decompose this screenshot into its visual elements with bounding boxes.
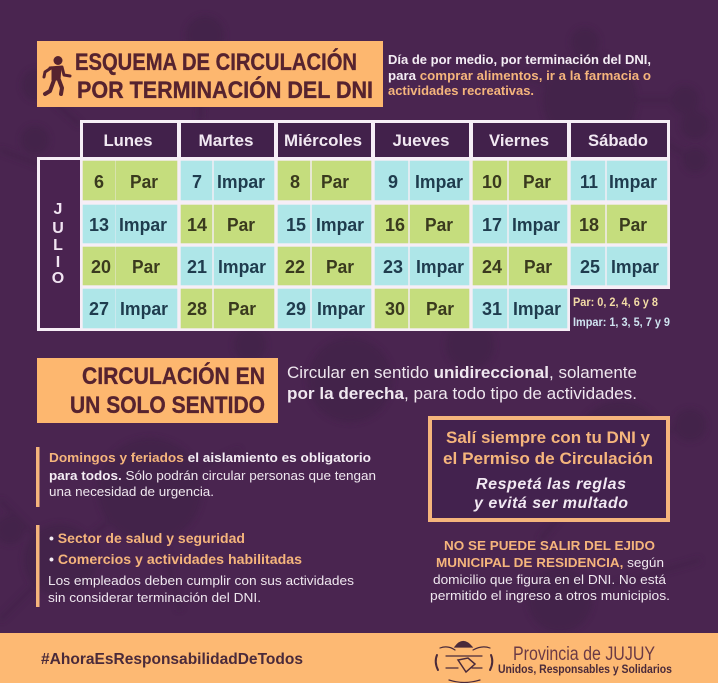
municipal restriction note: NO SE PUEDE SALIR DEL EJIDO [444, 538, 655, 553]
callout: carry DNI and permit: el Permiso de Circulación [443, 449, 653, 468]
week row: 27 to 31: Impar [120, 299, 168, 319]
week row: 27 to 31 [83, 289, 567, 328]
week row: 6 to 11 [83, 161, 667, 200]
one-way description [287, 363, 637, 403]
week row: 6 to 11: Par [130, 172, 158, 192]
title banner [37, 41, 383, 107]
weekday headers: Miércoles [284, 131, 362, 150]
callout: carry DNI and permit [430, 418, 668, 520]
week row: 6 to 11: Par [523, 172, 551, 192]
week row: 13 to 18: 14 [187, 215, 207, 235]
municipal restriction note: MUNICIPAL DE RESIDENCIA, según [436, 555, 664, 570]
sundays and holidays note: para todos. Sólo podrán circular personas que tengan [49, 468, 376, 483]
callout: carry DNI and permit: y evitá ser multado [473, 495, 628, 512]
week row: 27 to 31: 31 [482, 299, 502, 319]
weekday headers: Martes [198, 131, 254, 150]
month label: Julio [40, 160, 80, 328]
title text: ESQUEMA DE CIRCULACIÓN [75, 48, 357, 76]
calendar table [37, 120, 670, 331]
week row: 6 to 11: Par [321, 172, 349, 192]
intro text: actividades recreativas. [388, 83, 534, 98]
week row: 20 to 25: Par [524, 257, 552, 277]
week row: 27 to 31: 29 [286, 299, 306, 319]
week row: 13 to 18: 17 [482, 215, 502, 235]
exempt sectors note: Los empleados deben cumplir con sus actividades [48, 573, 355, 588]
exempt sectors note [36, 525, 355, 607]
title banner: POR TERMINACIÓN DEL DNI [77, 76, 373, 104]
week row: 13 to 18: Impar [119, 215, 167, 235]
province name and motto [498, 644, 672, 676]
week row: 13 to 18: 16 [385, 215, 405, 235]
week row: 20 to 25: Par [132, 257, 160, 277]
week row: 6 to 11: 10 [482, 172, 502, 192]
province name and motto: Unidos, Responsables y Solidarios [498, 662, 672, 676]
logo: Jujuy emblem [436, 642, 492, 682]
week row: 27 to 31: Impar [317, 299, 365, 319]
month label: Julio: L [53, 237, 63, 254]
exempt sectors note: • Comercios y actividades habilitadas [49, 552, 302, 567]
week row: 20 to 25: Impar [416, 257, 464, 277]
week row: 13 to 18: 13 [89, 215, 109, 235]
week row: 27 to 31: Par [426, 299, 454, 319]
week row: 13 to 18: Par [425, 215, 453, 235]
intro text: Día de por medio, por terminación del DNI, [388, 52, 651, 67]
week row: 20 to 25: Par [326, 257, 354, 277]
municipal restriction note [430, 538, 670, 603]
week row: 20 to 25 [83, 247, 667, 285]
footer band [0, 633, 718, 683]
month label: Julio: J [54, 201, 62, 218]
one-way description: por la derecha, para todo tipo de actividades. [287, 384, 637, 403]
weekday headers: Jueves [392, 131, 450, 150]
legend: par and impar digits [573, 295, 670, 329]
week row: 6 to 11: 9 [388, 172, 398, 192]
municipal restriction note: permitido el ingreso a otros municipios. [430, 588, 670, 603]
week row: 20 to 25: 24 [482, 257, 502, 277]
weekday headers: Lunes [104, 131, 152, 150]
month label: Julio: U [52, 220, 64, 237]
week row: 6 to 11: 11 [580, 172, 598, 192]
week row: 20 to 25: 22 [285, 257, 305, 277]
one-way circulation banner: CIRCULACIÓN EN [82, 362, 265, 390]
legend: par and impar digits: Par: 0, 2, 4, 6 y 8 [573, 295, 658, 309]
week row: 6 to 11: Impar [217, 172, 265, 192]
week row: 13 to 18: Par [227, 215, 255, 235]
intro text: para comprar alimentos, ir a la farmacia o [388, 68, 651, 83]
week row: 20 to 25: 23 [383, 257, 403, 277]
week row: 20 to 25: Impar [218, 257, 266, 277]
municipal restriction note: domicilio que figura en el DNI. No está [433, 572, 667, 587]
week row: 13 to 18: 18 [579, 215, 599, 235]
week row: 20 to 25: 25 [580, 257, 600, 277]
weekday headers: Viernes [489, 131, 549, 150]
week row: 20 to 25: Impar [611, 257, 659, 277]
hashtag: #AhoraEsResponsabilidadDeTodos [41, 651, 303, 668]
sundays and holidays note: una necesidad de urgencia. [49, 484, 214, 499]
legend: par and impar digits: Impar: 1, 3, 5, 7 y 9 [573, 315, 670, 329]
week row: 13 to 18: Impar [316, 215, 364, 235]
one-way circulation banner: UN SOLO SENTIDO [70, 392, 265, 419]
sundays and holidays note [36, 447, 376, 507]
sundays and holidays note: Domingos y feriados el aislamiento es obligatorio [49, 450, 371, 465]
month label: Julio: O [52, 270, 64, 287]
one-way description: Circular en sentido unidireccional, solamente [287, 363, 637, 382]
week row: 20 to 25: 20 [91, 257, 111, 277]
week row: 27 to 31: 30 [385, 299, 405, 319]
week row: 20 to 25: 21 [187, 257, 207, 277]
weekday headers: Sábado [588, 131, 648, 150]
week row: 27 to 31: 28 [187, 299, 207, 319]
callout: carry DNI and permit: Salí siempre con tu DNI y [446, 428, 651, 447]
week row: 27 to 31: Impar [513, 299, 561, 319]
month label: Julio: I [56, 254, 60, 271]
week row: 6 to 11: Impar [609, 172, 657, 192]
week row: 6 to 11: 6 [94, 172, 104, 192]
week row: 6 to 11: 7 [192, 172, 202, 192]
exempt sectors note: • Sector de salud y seguridad [49, 531, 245, 546]
exempt sectors note: sin considerar terminación del DNI. [48, 590, 261, 605]
callout: carry DNI and permit: Respetá las reglas [476, 476, 626, 493]
week row: 13 to 18: Impar [512, 215, 560, 235]
intro text [388, 52, 651, 98]
week row: 13 to 18 [83, 205, 667, 243]
week row: 27 to 31: 27 [89, 299, 109, 319]
one-way circulation banner [37, 358, 278, 423]
icon: walking person [44, 56, 70, 94]
week row: 13 to 18: 15 [286, 215, 306, 235]
week row: 6 to 11: 8 [290, 172, 300, 192]
week row: 13 to 18: Par [619, 215, 647, 235]
province name and motto: Provincia de JUJUY [513, 644, 655, 665]
weekday headers [83, 123, 667, 157]
week row: 6 to 11: Impar [415, 172, 463, 192]
week row: 27 to 31: Par [228, 299, 256, 319]
